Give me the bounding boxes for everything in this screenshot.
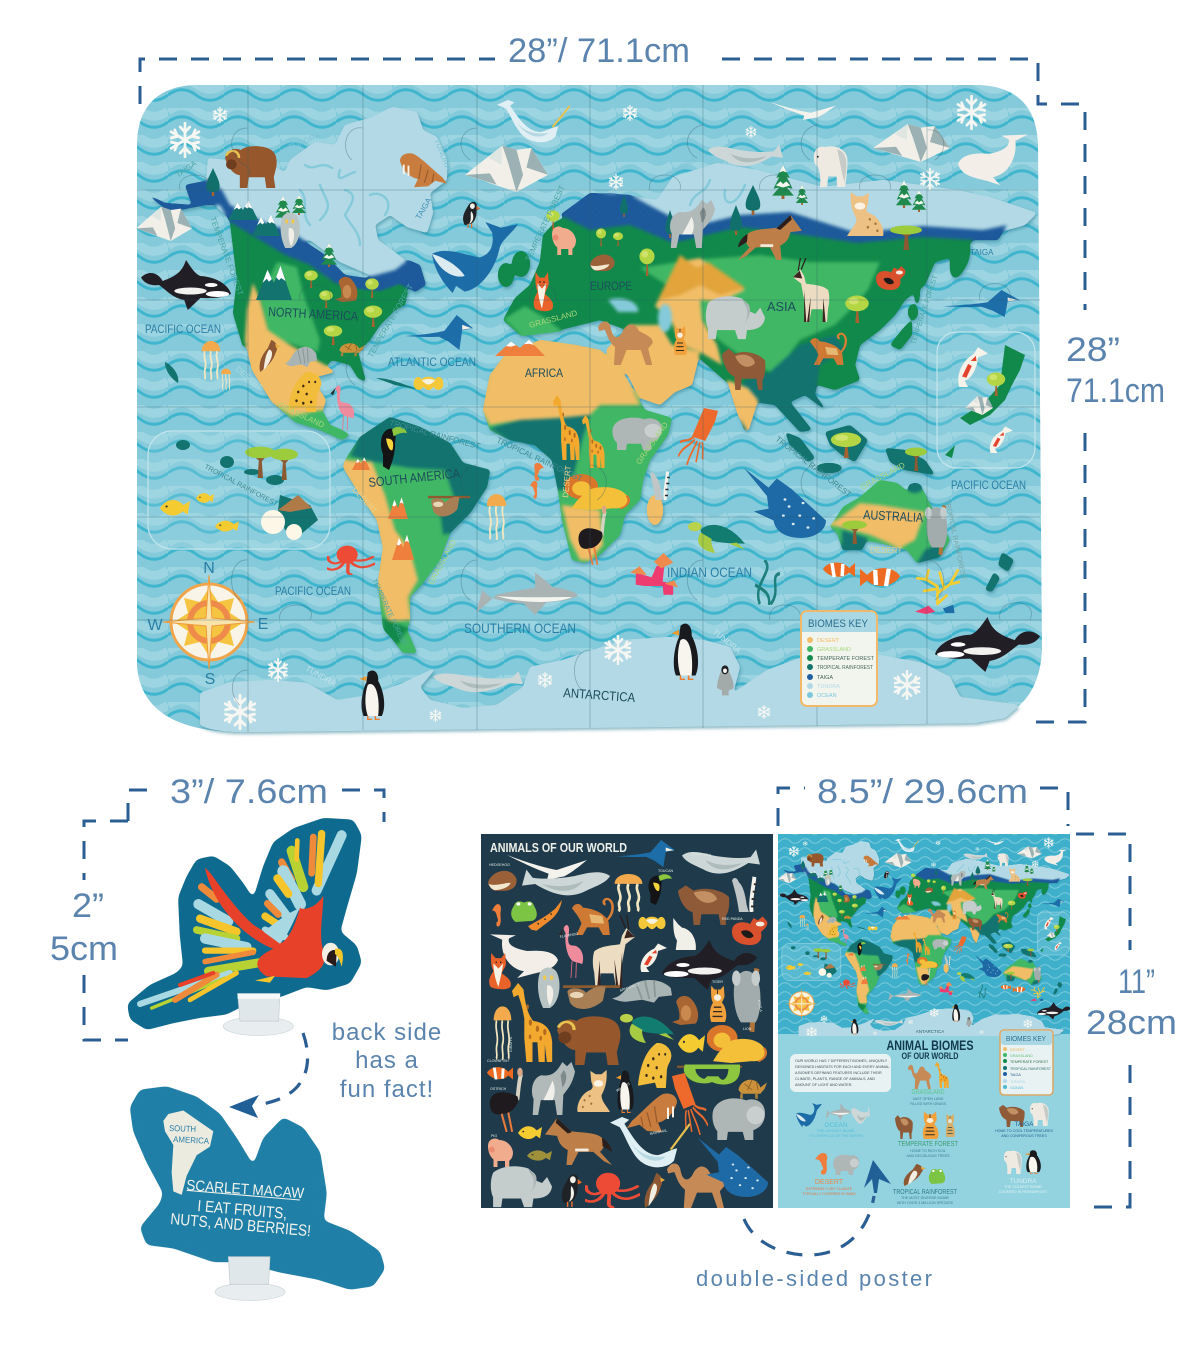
- poster animal names: LION: [743, 1027, 752, 1031]
- map labels: N: [203, 560, 215, 577]
- biome: tundra: THE COLDEST BIOME: [1004, 1185, 1042, 1189]
- puzzle piece cut lines: [137, 85, 1042, 732]
- poster intro box: CLIMATE, PLANTS, RANGE OF ANIMALS, AND: [795, 1077, 875, 1081]
- north america grassland: [260, 262, 320, 352]
- map labels: DESERT: [234, 365, 264, 392]
- biomes key: DESERT: [817, 638, 840, 644]
- poster animal names: NARWHAL: [649, 1128, 668, 1136]
- inset: hawaii: [148, 431, 330, 549]
- map labels: ASIA: [767, 299, 796, 314]
- dimension: poster width and height: 28cm: [1086, 1004, 1177, 1042]
- poster intro box: DESIGNED HABITATS FOR EACH AND EVERY ANIMAL.: [795, 1065, 890, 1069]
- central asia desert: [655, 258, 745, 365]
- biome: desert: TYPICALLY COVERED IN SAND: [802, 1192, 856, 1196]
- biome: ocean: OCEAN: [824, 1122, 848, 1129]
- biome: temperate forest: AND DECIDUOUS TREES: [906, 1154, 950, 1158]
- dimension: piece width and height: 5cm: [50, 930, 118, 968]
- poster animal names: TIGER: [712, 980, 723, 984]
- black and caspian seas: [608, 298, 672, 332]
- map labels: TAIGA: [970, 248, 994, 257]
- poster animal names: HARP SEAL: [692, 852, 712, 857]
- poster animal names: TOUCAN: [658, 869, 674, 873]
- map labels: TUNDRA: [664, 155, 698, 180]
- dimension: poster width and height: 8.5”/ 29.6cm: [817, 773, 1028, 811]
- map labels: TAIGA: [414, 196, 434, 221]
- map labels: DESERT: [870, 546, 902, 555]
- map labels: TUNDRA: [985, 679, 1020, 695]
- map labels: DESERT: [351, 485, 379, 515]
- map labels: S: [205, 671, 215, 688]
- poster intro box: OUR WORLD HAS 7 DIFFERENT BIOMES, UNIQUELY: [795, 1059, 888, 1063]
- biome: grassland: GRASSLAND: [912, 1089, 944, 1096]
- dimension: poster width and height: 11”: [1118, 963, 1155, 1001]
- compass rose: [163, 575, 255, 669]
- macaw piece: front: [127, 818, 362, 1030]
- macaw piece: back: SCARLET MACAW: [186, 1177, 305, 1202]
- north america temperate forest: [230, 222, 408, 382]
- south america rainforest: [350, 417, 490, 535]
- biomes key: [801, 611, 877, 706]
- map labels: GRASSLAND: [528, 308, 578, 330]
- macaw stand: [223, 994, 293, 1036]
- north america desert: [245, 283, 335, 418]
- southern africa desert: [562, 505, 603, 560]
- biome: temperate forest: HOME TO RICH SOIL: [910, 1149, 946, 1153]
- poster animal names: KOALA: [757, 999, 763, 1013]
- australia: [830, 480, 950, 563]
- mountains of central asia: [658, 255, 745, 300]
- puzzle: ocean board: [137, 85, 1042, 732]
- macaw piece: back: [130, 1086, 385, 1300]
- map labels: PACIFIC OCEAN: [951, 478, 1026, 492]
- north american arctic and greenland tundra: [205, 107, 447, 280]
- poster biomes key: BIOMES KEY: [1006, 1034, 1046, 1043]
- map labels: TEMPERATE FOREST: [370, 578, 408, 647]
- map labels: NORTH AMERICA: [268, 304, 359, 324]
- dimension: puzzle width: 28”/ 71.1cm: [508, 32, 690, 70]
- map labels: SOUTHERN OCEAN: [464, 620, 576, 636]
- poster intro box: [790, 1054, 891, 1092]
- arrow: to the back side: [229, 1033, 308, 1118]
- biomes key: BIOMES KEY: [808, 618, 869, 630]
- poster map: [778, 834, 1070, 1036]
- ocean animals: [141, 100, 1040, 692]
- arctic inlets: [300, 165, 745, 245]
- biome: ocean: IT COVERS 3/4 OF THE EARTH!: [809, 1134, 863, 1138]
- map labels: INDIAN OCEAN: [667, 564, 752, 580]
- caribbean islands: [165, 362, 420, 390]
- eurasian islands: [498, 238, 970, 350]
- new guinea and oceania trees: [831, 433, 927, 544]
- poster: animal biomes: OF OUR WORLD: [902, 1051, 959, 1061]
- arrow: double-sided poster: [744, 1160, 891, 1255]
- poster animal names: HEDGEHOG: [489, 863, 510, 867]
- poster biomes key: [1000, 1030, 1053, 1095]
- india peninsula: [727, 380, 758, 432]
- snowflakes: [171, 96, 985, 729]
- poster animal names: RED PANDA: [722, 917, 743, 921]
- south east asia rainforest: [733, 335, 845, 432]
- biome: temperate forest: [895, 1112, 959, 1158]
- biome: tropical rainforest: THE MOST DIVERSE BIOME: [901, 1196, 950, 1200]
- poster animal names: WALRUS: [616, 1081, 631, 1093]
- biomes key: TAIGA: [817, 675, 833, 681]
- icebergs: [136, 124, 950, 241]
- map labels: TEMPERATE FOREST: [366, 283, 415, 359]
- map labels: GRASSLAND: [427, 538, 458, 586]
- biomes key: TROPICAL RAINFOREST: [817, 665, 874, 671]
- poster intro box: AMOUNT OF LIGHT AND WATER.: [795, 1083, 852, 1087]
- map labels: SOUTH AMERICA: [368, 465, 461, 490]
- poster animal names: ARMADILLO: [619, 982, 640, 993]
- map labels: AFRICA: [525, 366, 563, 380]
- map labels: TAIGA: [174, 158, 199, 180]
- inset: japan: [937, 332, 1035, 468]
- biome: taiga: TAIGA: [1014, 1121, 1034, 1128]
- map labels: TROPICAL RAINFOREST: [203, 464, 279, 509]
- land masses: [143, 107, 1037, 732]
- poster animal names: CLOWNFISH: [487, 1059, 509, 1063]
- biomes key: TEMPERATE FOREST: [817, 656, 875, 662]
- macaw piece: back: NUTS, AND BERRIES!: [170, 1211, 312, 1240]
- poster animal names: PIG: [491, 1134, 497, 1138]
- poster biomes key: TUNDRA: [1010, 1080, 1026, 1084]
- map labels: GRASSLAND: [277, 401, 326, 430]
- dimension: piece width and height: 2”: [72, 887, 104, 925]
- map labels: [145, 131, 1026, 705]
- dimension: piece width and height: [50, 773, 384, 1040]
- map labels: TEMPERATE FOREST: [910, 274, 940, 346]
- poster animal names: OSTRICH: [490, 1087, 507, 1091]
- europe grassland: [504, 306, 562, 336]
- biome: ocean: THE LARGEST BIOME,: [817, 1129, 855, 1133]
- forests: [206, 165, 926, 345]
- map labels: TUNDRA: [304, 664, 338, 689]
- biome: temperate forest: TEMPERATE FOREST: [898, 1141, 959, 1148]
- poster biomes key: TAIGA: [1010, 1073, 1021, 1077]
- south america desert: [343, 460, 418, 622]
- biome: desert: EXTREMELY DRY CLIMATE: [806, 1187, 853, 1191]
- biome: tropical rainforest: WITH OVER 3 MILLION SPECIES!: [897, 1201, 953, 1205]
- indonesia and oceania islands: [785, 425, 1014, 592]
- poster title: ANIMALS OF OUR WORLD: [490, 840, 627, 855]
- poster heading: ANIMAL BIOMES: [886, 1037, 974, 1053]
- rocky mountains: [228, 200, 292, 300]
- biome: taiga: AND CONIFEROUS TREES: [1001, 1134, 1047, 1138]
- biome: taiga: HOME TO COOL TEMPERATURES: [995, 1129, 1054, 1133]
- biome: desert: [802, 1153, 859, 1196]
- map labels: PACIFIC OCEAN: [275, 584, 351, 598]
- map labels: TEMPERATE FOREST: [524, 184, 567, 263]
- map labels: PACIFIC OCEAN: [145, 322, 221, 336]
- poster animal names: GIRAFFE: [509, 1036, 513, 1052]
- map labels: ATLANTIC OCEAN: [388, 355, 476, 369]
- note: back side has a fun fact: has a: [355, 1047, 419, 1074]
- biome: grassland: VAST OPEN LAND: [913, 1097, 944, 1101]
- map labels: TROPICAL RAINFOREST: [774, 434, 853, 499]
- asia grassland: [640, 255, 880, 372]
- andes peaks: [352, 457, 414, 560]
- dimension: puzzle height: [1066, 331, 1165, 410]
- map labels: DESERT: [561, 465, 573, 498]
- note: back side has a fun fact: [332, 1019, 442, 1103]
- biome: tundra: TUNDRA: [1009, 1178, 1037, 1185]
- poster: animal biomes: ANTARCTICA: [916, 1029, 944, 1034]
- biomes key: GRASSLAND: [817, 647, 851, 653]
- biomes key: OCEAN: [817, 693, 837, 699]
- map labels: EUROPE: [590, 279, 632, 293]
- biome: ocean: [796, 1103, 870, 1138]
- madagascar: [647, 495, 663, 525]
- australia desert: [830, 503, 925, 548]
- macaw piece: back: I EAT FRUITS,: [197, 1198, 288, 1223]
- biome: grassland: [908, 1062, 949, 1106]
- congo rainforest: [490, 415, 590, 490]
- puzzle: map art (land, biomes and animals): [136, 96, 1040, 732]
- poster biomes key: GRASSLAND: [1010, 1054, 1033, 1058]
- arabian desert: [606, 325, 700, 405]
- note: double-sided poster: double-sided poster: [696, 1266, 933, 1291]
- map labels: GRASSLAND: [634, 420, 670, 466]
- poster: animal biomes: [778, 834, 1071, 1208]
- poster biomes key: OCEAN: [1010, 1086, 1023, 1090]
- eurasia temperate forest: [503, 200, 975, 390]
- map labels: ANTARCTICA: [563, 685, 636, 705]
- poster biomes key: TROPICAL RAINFOREST: [1010, 1067, 1052, 1071]
- map labels: TEMPERATE FOREST: [208, 216, 245, 297]
- note: back side has a fun fact: back side: [332, 1019, 442, 1046]
- poster biomes key: DESERT: [1010, 1048, 1026, 1052]
- poster: animals of our world: [481, 834, 773, 1208]
- dimension: puzzle height: 71.1cm: [1066, 372, 1165, 410]
- biome: tropical rainforest: [893, 1164, 958, 1205]
- land animals: [225, 146, 947, 720]
- biome: tropical rainforest: TROPICAL RAINFOREST: [893, 1189, 958, 1196]
- map labels: TROPICAL RAINFOREST: [495, 436, 584, 483]
- biome: grassland: FILLED WITH GRASS: [910, 1102, 947, 1106]
- patagonia temperate forest: [383, 618, 408, 645]
- map labels: GRASSLAND: [859, 461, 907, 492]
- poster intro box: A BIOME'S DEFINING FEATURES INCLUDE THEIR: [795, 1071, 882, 1075]
- macaw piece: back: AMERICA: [173, 1134, 210, 1146]
- eurasian taiga band: [560, 193, 1007, 243]
- dimension: puzzle height: 28”: [1066, 331, 1120, 369]
- biome: desert: DESERT: [815, 1179, 844, 1186]
- biome: tundra: [999, 1150, 1048, 1194]
- poster biomes key: TEMPERATE FOREST: [1010, 1060, 1049, 1064]
- dimension: poster width and height: [778, 773, 1177, 1207]
- note: back side has a fun fact: fun fact!: [340, 1076, 434, 1103]
- map labels: E: [258, 616, 268, 633]
- south america base: [343, 417, 490, 653]
- dimension: piece width and height: 3”/ 7.6cm: [170, 773, 328, 811]
- biome: tundra: COVERED IN PERMAFROST: [999, 1190, 1048, 1194]
- biome: taiga: [995, 1103, 1054, 1138]
- map labels: TUNDRA: [432, 137, 453, 172]
- sahara desert: [483, 340, 640, 425]
- macaw piece: back: SOUTH: [169, 1123, 196, 1134]
- north american taiga: [143, 180, 426, 292]
- africa base: [483, 340, 672, 563]
- map labels: TROPICAL RAINFOREST: [943, 499, 967, 581]
- map labels: AUSTRALIA: [863, 507, 924, 525]
- poster animal names: [487, 852, 763, 1138]
- siberian tundra: [590, 163, 1037, 240]
- poster animal names: FLAMINGO: [559, 932, 579, 939]
- antarctica: [200, 637, 1020, 732]
- central america: [272, 402, 350, 440]
- map labels: W: [147, 617, 163, 634]
- map labels: TUNDRA: [287, 131, 322, 152]
- map labels: TROPICAL RAINFOREST: [388, 418, 481, 451]
- map labels: TUNDRA: [711, 627, 743, 656]
- poster animals: [487, 840, 768, 1208]
- atlas mountains: [495, 340, 545, 356]
- australia rainforest corner: [842, 530, 945, 563]
- biomes key: TUNDRA: [817, 684, 840, 690]
